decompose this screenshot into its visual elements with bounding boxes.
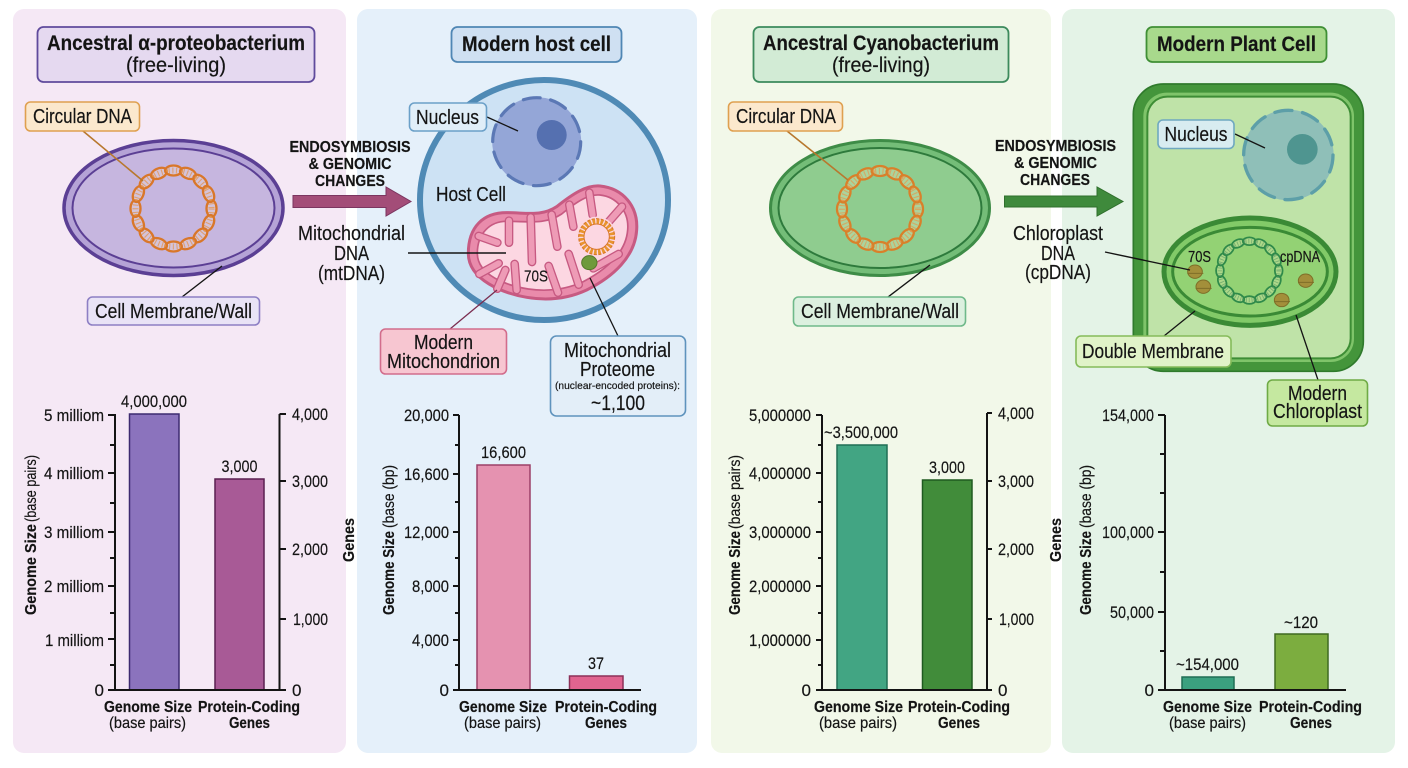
bar chart: mitochondrial genome: 16,600 [404, 465, 449, 484]
bar chart: ancestral alpha-proteobacterium genome: 3,000 [222, 457, 258, 476]
label: Mitochondrial Proteome [550, 336, 686, 416]
diagram: bacterial cell [64, 140, 283, 276]
title: Ancestral α-proteobacterium: (free-living) [126, 54, 226, 77]
bar chart: ancestral alpha-proteobacterium genome: Genome Size [23, 524, 40, 615]
bar chart: chloroplast genome: ~120 [1284, 613, 1318, 632]
bar chart: ancestral cyanobacterium genome: 1,000000 [749, 631, 811, 650]
leader line: modern chloroplast [1296, 315, 1318, 380]
bar chart: ancestral cyanobacterium genome: (base pairs) [819, 715, 897, 732]
label: Cell Membrane/Wall: Cell Membrane/Wall [801, 301, 959, 323]
mitochondrion [468, 186, 637, 299]
bar chart: ancestral alpha-proteobacterium genome: 3 milliom [44, 523, 104, 542]
bar chart: ancestral alpha-proteobacterium genome: Protein-Coding [198, 699, 300, 716]
bar: genome size [837, 445, 887, 690]
70S ribosome label: 70S [524, 268, 548, 286]
label: Modern Chloroplast: Chloroplast [1273, 401, 1362, 423]
label: Mitochondrial DNA (mtDNA) [298, 223, 405, 285]
bar chart: ancestral alpha-proteobacterium genome: 4 milliom [44, 464, 104, 483]
bar chart: ancestral cyanobacterium genome: 3,000 [929, 458, 965, 477]
bar chart: mitochondrial genome: 20,000 [404, 406, 449, 425]
leader line: nucleus [487, 117, 518, 131]
bar: protein-coding genes [1275, 634, 1328, 690]
bar chart: ancestral cyanobacterium genome: 4,000 [998, 404, 1034, 423]
panel: modern host cell [357, 9, 697, 753]
nucleus [492, 97, 581, 186]
nucleus [1243, 110, 1334, 200]
bar chart: mitochondrial genome: 16,600 [481, 443, 526, 462]
title: Modern host cell [452, 27, 622, 62]
label: Nucleus: Nucleus [416, 107, 479, 129]
label: Mitochondrial DNA (mtDNA): (mtDNA) [318, 263, 385, 285]
bar chart: mitochondrial genome: 37 [588, 654, 604, 673]
bar chart: ancestral cyanobacterium genome: 3,000 [998, 472, 1034, 491]
leader line: nucleus [1235, 134, 1265, 148]
label: Chloroplast DNA (cpDNA) [1013, 223, 1103, 284]
bar: protein-coding genes [215, 479, 264, 690]
bar chart: ancestral alpha-proteobacterium genome: Genes [229, 715, 270, 732]
bar chart: ancestral alpha-proteobacterium genome: (base pairs) [109, 715, 186, 732]
bar chart: ancestral cyanobacterium genome: 2,000000 [749, 577, 811, 596]
leader line: cell membrane [182, 266, 222, 297]
bar chart: mitochondrial genome: (base (bp) [381, 465, 398, 528]
bar chart: chloroplast genome: Protein-Coding [1259, 699, 1362, 716]
arrow label: endosymbiosis, mitochondrion [290, 139, 411, 190]
bar chart: ancestral alpha-proteobacterium genome: 4,000 [292, 405, 328, 424]
bar chart: ancestral cyanobacterium genome: (base pairs) [727, 455, 744, 529]
bar chart: ancestral cyanobacterium genome: 0 [998, 681, 1007, 700]
panel: ancestral cyanobacterium [711, 9, 1051, 753]
label: Modern Chloroplast [1268, 380, 1368, 426]
bar chart: chloroplast genome: Genome Size [1163, 699, 1252, 716]
bar chart: ancestral alpha-proteobacterium genome: 2 milliom [44, 577, 104, 596]
70S ribosome label: 70S [1188, 249, 1211, 266]
bar chart: ancestral alpha-proteobacterium genome: Genome Size [104, 699, 192, 716]
bar chart: ancestral cyanobacterium genome: 2,000 [998, 540, 1034, 559]
label: Chloroplast DNA (cpDNA): (cpDNA) [1025, 262, 1091, 284]
panel: ancestral alpha-proteobacterium [13, 9, 346, 753]
bar chart: mitochondrial genome: Genome Size [381, 531, 398, 615]
bar chart: chloroplast genome: 50,000 [1110, 603, 1154, 622]
bar chart: ancestral cyanobacterium genome: 3,000000 [749, 523, 811, 542]
bar: genome size [1182, 677, 1234, 690]
label: Chloroplast DNA (cpDNA): DNA [1041, 243, 1076, 265]
title: Ancestral Cyanobacterium: (free-living) [832, 54, 930, 77]
bar chart: mitochondrial genome: Genome Size [459, 699, 547, 716]
bar chart: ancestral alpha-proteobacterium genome: (base pairs) [23, 455, 40, 522]
bar chart: ancestral alpha-proteobacterium genome: 0 [95, 681, 104, 700]
bar chart: ancestral cyanobacterium genome: Genes [938, 715, 980, 732]
diagram: plant cell with chloroplast [1133, 84, 1363, 371]
bar chart: chloroplast genome: 154,000 [1102, 406, 1154, 425]
bar chart: chloroplast genome: 0 [1145, 681, 1154, 700]
bar: genome size [477, 465, 530, 690]
bar chart: ancestral alpha-proteobacterium genome: 1,000 [293, 610, 328, 629]
label: Double Membrane: Double Membrane [1082, 341, 1224, 363]
bar chart: mitochondrial genome: 4,000 [412, 631, 449, 650]
bar chart: ancestral cyanobacterium genome: Protein-Coding [908, 699, 1010, 716]
cpDNA label: cpDNA [1280, 249, 1320, 266]
bar: protein-coding genes [570, 676, 623, 690]
label: Modern Mitochondrion: Mitochondrion [387, 351, 500, 373]
bar chart: ancestral alpha-proteobacterium genome: 1 milliom [45, 631, 104, 650]
leader line: circular DNA [83, 131, 143, 181]
label: Mitochondrial DNA (mtDNA): Mitochondrial [298, 223, 405, 245]
bar chart: ancestral cyanobacterium genome [727, 404, 1034, 732]
bar chart: ancestral alpha-proteobacterium genome: 3,000 [292, 472, 328, 491]
axis title: Genes, third chart: Genes [1048, 518, 1065, 562]
bar chart: ancestral alpha-proteobacterium genome [23, 392, 328, 732]
arrow: chloroplast endosymbiosis [1004, 187, 1123, 216]
label: Circular DNA: Circular DNA [736, 106, 837, 128]
bar chart: ancestral cyanobacterium genome: 4,000000 [749, 464, 811, 483]
bar chart: chloroplast genome [1078, 406, 1362, 732]
leader line: mitochondrial DNA [408, 252, 506, 254]
bar chart: mitochondrial genome: 0 [440, 681, 449, 700]
arrow label: endosymbiosis, mitochondrion: & GENOMIC [308, 156, 392, 173]
leader line: modern mitochondrion [450, 290, 497, 329]
bar chart: chloroplast genome: (base (bp) [1078, 465, 1095, 528]
title: Ancestral α-proteobacterium: Ancestral α-proteobacterium [47, 32, 305, 55]
label: Circular DNA [26, 102, 140, 131]
bar chart: mitochondrial genome: Protein-Coding [555, 699, 657, 716]
label: Circular DNA [728, 102, 842, 131]
panel: modern plant cell [1062, 9, 1395, 753]
diagram: host cell with mitochondrion [420, 80, 668, 320]
diagram: cyanobacterial cell [770, 140, 990, 276]
arrow label: endosymbiosis, chloroplast: & GENOMIC [1014, 155, 1097, 172]
title: Modern Plant Cell [1146, 27, 1326, 62]
bar chart: ancestral cyanobacterium genome: 5,000000 [749, 406, 811, 425]
bar chart: ancestral alpha-proteobacterium genome: 0 [292, 681, 301, 700]
title: Ancestral Cyanobacterium: Ancestral Cyanobacterium [763, 32, 999, 55]
leader line: circular DNA [787, 131, 848, 180]
label: Chloroplast DNA (cpDNA): Chloroplast [1013, 223, 1103, 245]
bar chart: chloroplast genome: Genome Size [1078, 531, 1095, 615]
label: Modern Chloroplast: Modern [1288, 383, 1347, 405]
arrow: mitochondrial endosymbiosis [293, 187, 411, 216]
leader line: cell membrane [888, 265, 930, 297]
arrow label: endosymbiosis, chloroplast: ENDOSYMBIOSIS [995, 138, 1116, 155]
bar chart: ancestral cyanobacterium genome: ~3,500,000 [824, 423, 898, 442]
title: Modern host cell: Modern host cell [462, 33, 611, 56]
bar chart: mitochondrial genome [381, 406, 657, 732]
label: Double Membrane [1076, 336, 1231, 367]
label: Modern Mitochondrion: Modern [414, 332, 473, 354]
host cell text: Host Cell [436, 184, 506, 206]
bar chart: ancestral cyanobacterium genome: 0 [802, 681, 811, 700]
label: Circular DNA: Circular DNA [33, 106, 133, 128]
title: Ancestral α-proteobacterium [38, 27, 314, 82]
bar chart: ancestral alpha-proteobacterium genome: 5 milliom [44, 406, 104, 425]
label: Nucleus [1158, 120, 1234, 148]
bar chart: chloroplast genome: ~154,000 [1176, 655, 1239, 674]
arrow label: endosymbiosis, mitochondrion: CHANGES [315, 173, 385, 190]
leader line: mitochondrial proteome [590, 278, 618, 336]
bar chart: mitochondrial genome: 12,000 [404, 523, 449, 542]
leader line: double membrane [1164, 311, 1195, 336]
label: Cell Membrane/Wall: Cell Membrane/Wall [95, 301, 252, 323]
arrow label: endosymbiosis, mitochondrion: ENDOSYMBIOSIS [290, 139, 411, 156]
title: Ancestral Cyanobacterium [754, 27, 1008, 82]
bar chart: ancestral cyanobacterium genome: Genome Size [727, 531, 744, 615]
bar chart: mitochondrial genome: 8,000 [412, 577, 449, 596]
arrow label: endosymbiosis, chloroplast [995, 138, 1116, 189]
bar chart: mitochondrial genome: (base pairs) [464, 715, 541, 732]
leader line: chloroplast DNA [1105, 252, 1190, 270]
label: Cell Membrane/Wall [794, 297, 966, 326]
bar chart: ancestral cyanobacterium genome: 1,000 [999, 610, 1034, 629]
title: Modern Plant Cell: Modern Plant Cell [1157, 33, 1316, 56]
bar chart: chloroplast genome: 100,000 [1102, 523, 1154, 542]
axis title: Genes, first chart: Genes [341, 518, 358, 562]
bar: protein-coding genes [922, 480, 972, 690]
bar chart: mitochondrial genome: Genes [585, 715, 627, 732]
label: Mitochondrial Proteome: Proteome [580, 359, 655, 381]
arrow label: endosymbiosis, chloroplast: CHANGES [1020, 172, 1090, 189]
label: Mitochondrial Proteome: (nuclear-encoded proteins): [555, 380, 680, 392]
bar chart: ancestral alpha-proteobacterium genome: 2,000 [292, 540, 328, 559]
bar chart: ancestral alpha-proteobacterium genome: 4,000,000 [121, 392, 187, 411]
label: Mitochondrial DNA (mtDNA): DNA [334, 243, 370, 265]
label: Mitochondrial Proteome: ~1,100 [591, 392, 645, 415]
bar chart: ancestral cyanobacterium genome: Genome Size [814, 699, 903, 716]
label: Nucleus: Nucleus [1164, 124, 1228, 146]
bar chart: chloroplast genome: (base pairs) [1169, 715, 1246, 732]
label: Mitochondrial Proteome: Mitochondrial [564, 340, 671, 362]
bar chart: chloroplast genome: Genes [1290, 715, 1332, 732]
chloroplast [1164, 218, 1336, 325]
label: Modern Mitochondrion [380, 329, 506, 374]
bar: genome size [130, 414, 179, 690]
